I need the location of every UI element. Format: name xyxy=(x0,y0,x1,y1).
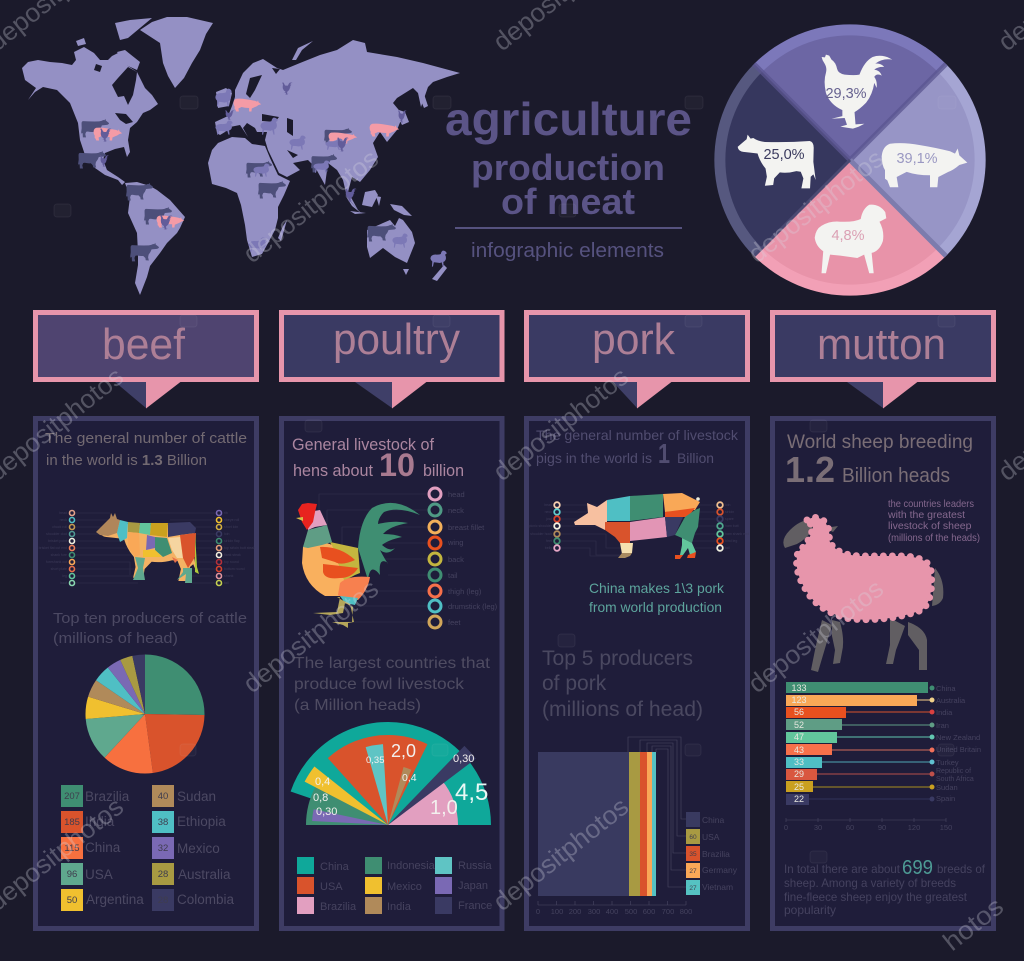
axis: 300 xyxy=(588,907,600,916)
callout: China share xyxy=(589,580,725,615)
country labels: Australia xyxy=(936,696,966,705)
cut labels: hoof xyxy=(60,581,67,585)
cut labels: thigh (leg) xyxy=(448,587,482,596)
intro text: pig count: Billion xyxy=(677,450,714,466)
fan chart values: 4,5 xyxy=(455,779,488,806)
closing text: breeds of sheep: 699 xyxy=(902,857,933,879)
closing text: breeds of sheep: breeds of xyxy=(937,862,986,876)
axis: 120 xyxy=(908,823,920,832)
tab: beef xyxy=(36,312,256,408)
intro text: pig count: The general number of livestock xyxy=(536,427,739,443)
axis: 400 xyxy=(606,907,618,916)
bar values: 33 xyxy=(794,757,804,767)
ring legend xyxy=(429,488,441,628)
country labels: Sudan xyxy=(936,783,958,792)
legend: Germany xyxy=(702,865,738,875)
left ring legend xyxy=(554,502,560,551)
closing text: breeds of sheep xyxy=(784,857,986,917)
cut labels: neck xyxy=(448,506,464,515)
cut labels: loin xyxy=(224,532,230,536)
cut labels: hind leg xyxy=(725,539,737,543)
legend: cattle producers: 50 xyxy=(67,895,77,906)
legend: fowl countries: Japan xyxy=(458,880,488,892)
heading: top 5 pork producers: (millions of head) xyxy=(542,698,703,721)
cut labels: brisket flat cut end xyxy=(39,546,67,550)
map landmasses xyxy=(22,17,460,295)
fan chart values: 0,30 xyxy=(453,753,474,765)
fan chart values: 2,0 xyxy=(391,741,416,761)
axis: 800 xyxy=(680,907,692,916)
legend: cattle producers: 96 xyxy=(67,869,77,880)
cow body parts xyxy=(96,513,199,583)
legend: 27 xyxy=(689,885,697,892)
axis xyxy=(784,818,952,832)
intro text: sheep breeding: Billion heads xyxy=(842,465,950,487)
stock watermarks: depositphotos xyxy=(742,573,889,699)
fan chart values: 0,4 xyxy=(315,776,330,788)
panel: mutton xyxy=(772,418,994,928)
fan chart values: 0,35 xyxy=(366,755,384,766)
heading: fowl livestock: The largest countries that xyxy=(294,655,491,672)
legend: cattle producers: Mexico xyxy=(177,841,220,856)
stock watermarks: depositphotos xyxy=(487,361,634,487)
cow 25,0% xyxy=(738,135,816,188)
cut labels: tail xyxy=(224,581,229,585)
right ring legend xyxy=(216,510,222,586)
subtitle: infographic elements xyxy=(471,240,664,262)
intro text: hens count: General livestock of xyxy=(292,436,434,454)
legend: cattle producers: 28 xyxy=(158,895,168,906)
country labels: Spain xyxy=(936,794,955,803)
pig 39,1%: 39,1% xyxy=(896,151,938,167)
cut labels: loin xyxy=(725,503,731,507)
axis xyxy=(536,901,692,916)
caption: country leaders: with the greatest xyxy=(887,509,965,521)
bar values: 123 xyxy=(791,695,807,705)
intro text: cattle count: The general number of cattle xyxy=(45,430,247,447)
pig 39,1% xyxy=(882,143,967,187)
caption: country leaders: the countries leaders xyxy=(888,498,974,510)
cut labels: shank fore xyxy=(51,553,67,557)
axis: 0 xyxy=(784,823,788,832)
bar values: 47 xyxy=(794,732,804,742)
axis: 0 xyxy=(536,907,540,916)
bar values: 22 xyxy=(794,794,804,804)
legend: 60 xyxy=(689,834,697,841)
cut labels: tail xyxy=(725,546,730,550)
bar values: 43 xyxy=(794,745,804,755)
cut labels: sirloin flap xyxy=(224,539,240,543)
intro text: sheep breeding xyxy=(785,432,973,490)
legend: USA xyxy=(702,832,720,842)
pig body parts xyxy=(574,493,700,559)
stock watermarks: depositphotos xyxy=(237,143,384,269)
tab: poultry xyxy=(282,312,502,408)
cut labels: shank xyxy=(224,574,234,578)
sheep illustration xyxy=(783,518,943,672)
bar values: 29 xyxy=(794,769,804,779)
cut labels: sirloin xyxy=(725,510,734,514)
heading: top ten producers: (millions of head) xyxy=(53,630,178,647)
right ring legend xyxy=(717,502,723,551)
chicken markers xyxy=(100,82,407,230)
country labels xyxy=(936,684,981,803)
fan chart values: 0,30 xyxy=(316,806,337,818)
cow cuts diagram xyxy=(39,510,255,586)
heading: top 5 pork producers xyxy=(542,647,703,721)
cow 25,0%: 25,0% xyxy=(763,147,805,163)
legend: fowl countries: China xyxy=(320,861,350,873)
title: production: production xyxy=(471,147,665,188)
cut labels: neck xyxy=(545,510,552,514)
cut labels: leg xyxy=(62,574,67,578)
closing text: breeds of sheep: popularity xyxy=(784,903,836,917)
heading: top 5 pork producers: Top 5 producers xyxy=(542,647,693,670)
fan chart values: 0,8 xyxy=(313,792,328,804)
title: agriculture: agriculture xyxy=(445,93,692,145)
legend: cattle producers: 185 xyxy=(64,817,80,828)
legend: cattle producers: 115 xyxy=(64,843,80,854)
cut labels: shoulder hock xyxy=(530,532,552,536)
tab: mutton: mutton xyxy=(817,320,946,369)
legend: 35 xyxy=(689,851,697,858)
legend: cattle producers: Sudan xyxy=(177,789,216,804)
country labels: India xyxy=(936,708,953,717)
stock watermarks: hotos xyxy=(937,891,1009,957)
leader lines xyxy=(560,505,717,556)
legs, face and tail xyxy=(783,520,943,672)
cut labels: ham shank end xyxy=(725,532,749,536)
inland water and seas xyxy=(94,64,298,158)
cut labels: back xyxy=(448,555,464,564)
intro text: hens count xyxy=(292,436,464,483)
bar values: 52 xyxy=(794,720,804,730)
left ring legend xyxy=(70,510,74,586)
legend: 27 xyxy=(689,868,697,875)
tab: poultry: poultry xyxy=(333,315,460,364)
tail feathers xyxy=(358,503,420,580)
cut labels: foreshank cut xyxy=(46,560,67,564)
fan chart values: 1,0 xyxy=(430,797,458,819)
legend: cattle producers xyxy=(61,785,235,911)
intro text: hens count: 10 xyxy=(379,447,415,483)
stock watermarks: depositphotos xyxy=(237,573,384,699)
end dots xyxy=(930,686,934,802)
beak xyxy=(296,517,303,521)
leader lines xyxy=(75,513,216,583)
legend: cattle producers: Australia xyxy=(178,867,231,882)
bar values xyxy=(791,683,807,804)
legend: cattle producers: Colombia xyxy=(177,892,235,907)
closing text: breeds of sheep: sheep. Among a variety of breeds xyxy=(784,876,956,890)
stock watermarks: depositphotos xyxy=(487,791,634,917)
intro text: hens count: billion xyxy=(423,462,464,480)
legend: cattle producers: 40 xyxy=(158,791,168,802)
legend: fowl countries: India xyxy=(387,901,412,913)
title block xyxy=(445,93,692,262)
cut labels: rib xyxy=(224,511,228,515)
axis: 600 xyxy=(643,907,655,916)
cut labels: chuck roll xyxy=(52,525,67,529)
back xyxy=(330,542,360,583)
legend: cattle producers: 38 xyxy=(158,817,168,828)
cut labels: ribeye roll xyxy=(224,518,239,522)
breast xyxy=(302,543,345,596)
bars xyxy=(786,682,928,805)
country labels: South Africa xyxy=(936,776,974,783)
intro text: pig count: pigs in the world is xyxy=(536,450,652,466)
country labels: Turkey xyxy=(936,758,959,767)
legend: Brazilia xyxy=(702,849,730,859)
tab: pork: pork xyxy=(592,315,676,364)
cut labels: picnic shoulder xyxy=(529,524,553,528)
legend: China xyxy=(702,815,724,825)
cut labels: head xyxy=(59,511,67,515)
intro text: sheep breeding: World sheep breeding xyxy=(787,432,973,453)
cut labels: wing xyxy=(447,538,463,547)
outer sectors xyxy=(714,24,986,296)
cut labels: short loin xyxy=(224,525,238,529)
pig markers xyxy=(94,99,399,228)
cow markers xyxy=(78,119,396,261)
panel: pork xyxy=(526,418,749,928)
chicken 29,3% xyxy=(822,55,892,129)
fan chart: fowl by country xyxy=(310,741,488,903)
cut labels: feet xyxy=(448,618,461,627)
legend: Vietnam xyxy=(702,882,733,892)
sheep 4,8%: 4,8% xyxy=(831,228,865,244)
closing text: breeds of sheep: In total there are about xyxy=(784,862,901,876)
tab: beef: beef xyxy=(102,320,186,369)
legend: fowl countries: USA xyxy=(320,881,343,893)
tab: pork xyxy=(526,312,748,408)
cut labels: jowl xyxy=(545,517,552,521)
legend: fowl countries: Russia xyxy=(458,860,493,872)
thigh xyxy=(338,577,370,600)
cut labels: bottom round xyxy=(224,567,245,571)
bar chart: sheep by country xyxy=(784,682,981,832)
cut labels: drumstick (leg) xyxy=(448,602,498,611)
caption: country leaders: (millions of the heads) xyxy=(888,532,980,544)
axis: 90 xyxy=(878,823,886,832)
legend: cattle producers: Brazilia xyxy=(85,789,130,804)
cut labels: breast fillet xyxy=(448,523,485,532)
legend xyxy=(686,812,738,895)
circular share chart xyxy=(714,24,986,296)
comb xyxy=(298,503,317,530)
panel: beef xyxy=(36,418,256,928)
axis: 30 xyxy=(814,823,822,832)
cut labels xyxy=(39,511,255,585)
legend: fowl countries: Mexico xyxy=(387,881,422,893)
cut labels: brisket point xyxy=(48,539,67,543)
head xyxy=(308,510,327,530)
intro text: pig count xyxy=(536,427,739,469)
cut labels: head xyxy=(544,503,552,507)
heading: fowl livestock xyxy=(294,655,491,714)
intro text: pig count: 1 xyxy=(658,438,670,469)
cut labels: head xyxy=(448,490,465,499)
chicken 29,3%: 29,3% xyxy=(825,86,867,102)
bar values: 133 xyxy=(791,683,807,693)
axis: 200 xyxy=(569,907,581,916)
leader lines xyxy=(809,700,932,799)
wing xyxy=(320,547,358,578)
closing text: breeds of sheep: fine-fleece sheep enjoy the greatest xyxy=(784,890,968,904)
stacked bar: pork producers xyxy=(536,737,738,916)
bar values: 56 xyxy=(794,707,804,717)
legend: cattle producers: Ethiopia xyxy=(177,814,226,829)
legend: cattle producers: China xyxy=(85,840,121,855)
cut labels: shoulder clod xyxy=(46,532,67,536)
pig cuts diagram xyxy=(529,493,749,559)
axis: 60 xyxy=(846,823,854,832)
cut labels: top round xyxy=(224,560,239,564)
axis: 500 xyxy=(625,907,637,916)
panel: poultry xyxy=(282,418,502,928)
country labels: New Zealand xyxy=(936,733,980,742)
cut labels: ham butt xyxy=(725,524,739,528)
cut labels: belly xyxy=(545,546,552,550)
legend: fowl countries: Indonesia xyxy=(387,860,436,872)
heading: fowl livestock: produce fowl livestock xyxy=(294,676,465,693)
cut labels: tail xyxy=(448,571,458,580)
cut labels: spare xyxy=(725,517,734,521)
intro text: sheep breeding: 1.2 xyxy=(785,449,835,490)
sheep markers xyxy=(215,89,447,267)
title: of meat: of meat xyxy=(501,181,635,222)
cut labels: neck xyxy=(60,518,67,522)
legend: cattle producers: USA xyxy=(85,867,113,882)
cut labels: feet xyxy=(546,539,552,543)
legend: fowl countries: France xyxy=(458,900,492,912)
cut labels xyxy=(447,490,498,627)
axis: 150 xyxy=(940,823,952,832)
cow silhouette underlay xyxy=(99,516,196,581)
callout: China share: from world production xyxy=(589,599,722,615)
pie chart: top cattle producers xyxy=(115,684,175,744)
fan chart values xyxy=(313,741,488,819)
rooster cuts diagram xyxy=(296,488,498,628)
stock watermarks: depositphotos xyxy=(742,143,889,269)
caption: country leaders: livestock of sheep xyxy=(888,520,972,532)
cut labels xyxy=(529,503,749,550)
legend: fowl countries xyxy=(297,857,493,914)
heading: fowl livestock: (a Million heads) xyxy=(294,697,421,714)
cut labels: top sirloin butt steak xyxy=(224,546,255,550)
legend: cattle producers: Argentina xyxy=(86,892,144,907)
legend: cattle producers: 32 xyxy=(158,843,168,854)
intro text: cattle count xyxy=(45,430,247,469)
country labels: China xyxy=(936,684,956,693)
country labels: Republic of xyxy=(936,768,971,775)
heading: top 5 pork producers: of pork xyxy=(542,672,607,695)
heading: top ten producers: Top ten producers of cattle xyxy=(53,610,247,627)
world map with livestock markers xyxy=(22,17,460,295)
drumstick xyxy=(340,596,358,605)
callout: China share: China makes 1\3 pork xyxy=(589,580,725,596)
tab: mutton xyxy=(772,312,994,408)
sheep 4,8% xyxy=(815,205,886,273)
legend: cattle producers: 207 xyxy=(64,791,80,802)
cut labels: flank steak xyxy=(224,553,241,557)
bar values: 25 xyxy=(794,782,804,792)
cut labels: short plate xyxy=(51,567,67,571)
neck xyxy=(303,525,332,548)
country labels: Iran xyxy=(936,721,949,730)
legend: cattle producers: India xyxy=(85,814,115,829)
legs xyxy=(313,597,354,628)
country labels: United Britain xyxy=(936,745,981,754)
woolly body xyxy=(797,518,932,620)
legend: cattle producers: 28 xyxy=(158,869,168,880)
heading: top ten producers xyxy=(53,610,247,647)
leader lines xyxy=(319,494,428,622)
axis: 700 xyxy=(662,907,674,916)
intro text: hens count: hens about xyxy=(293,462,373,480)
axis: 100 xyxy=(551,907,563,916)
caption: country leaders xyxy=(887,498,980,544)
inner sectors xyxy=(725,35,975,285)
fan chart values: 0,4 xyxy=(402,772,417,784)
legend: fowl countries: Brazilia xyxy=(320,901,357,913)
intro text: cattle count: in the world is 1.3 Billion xyxy=(46,452,207,469)
